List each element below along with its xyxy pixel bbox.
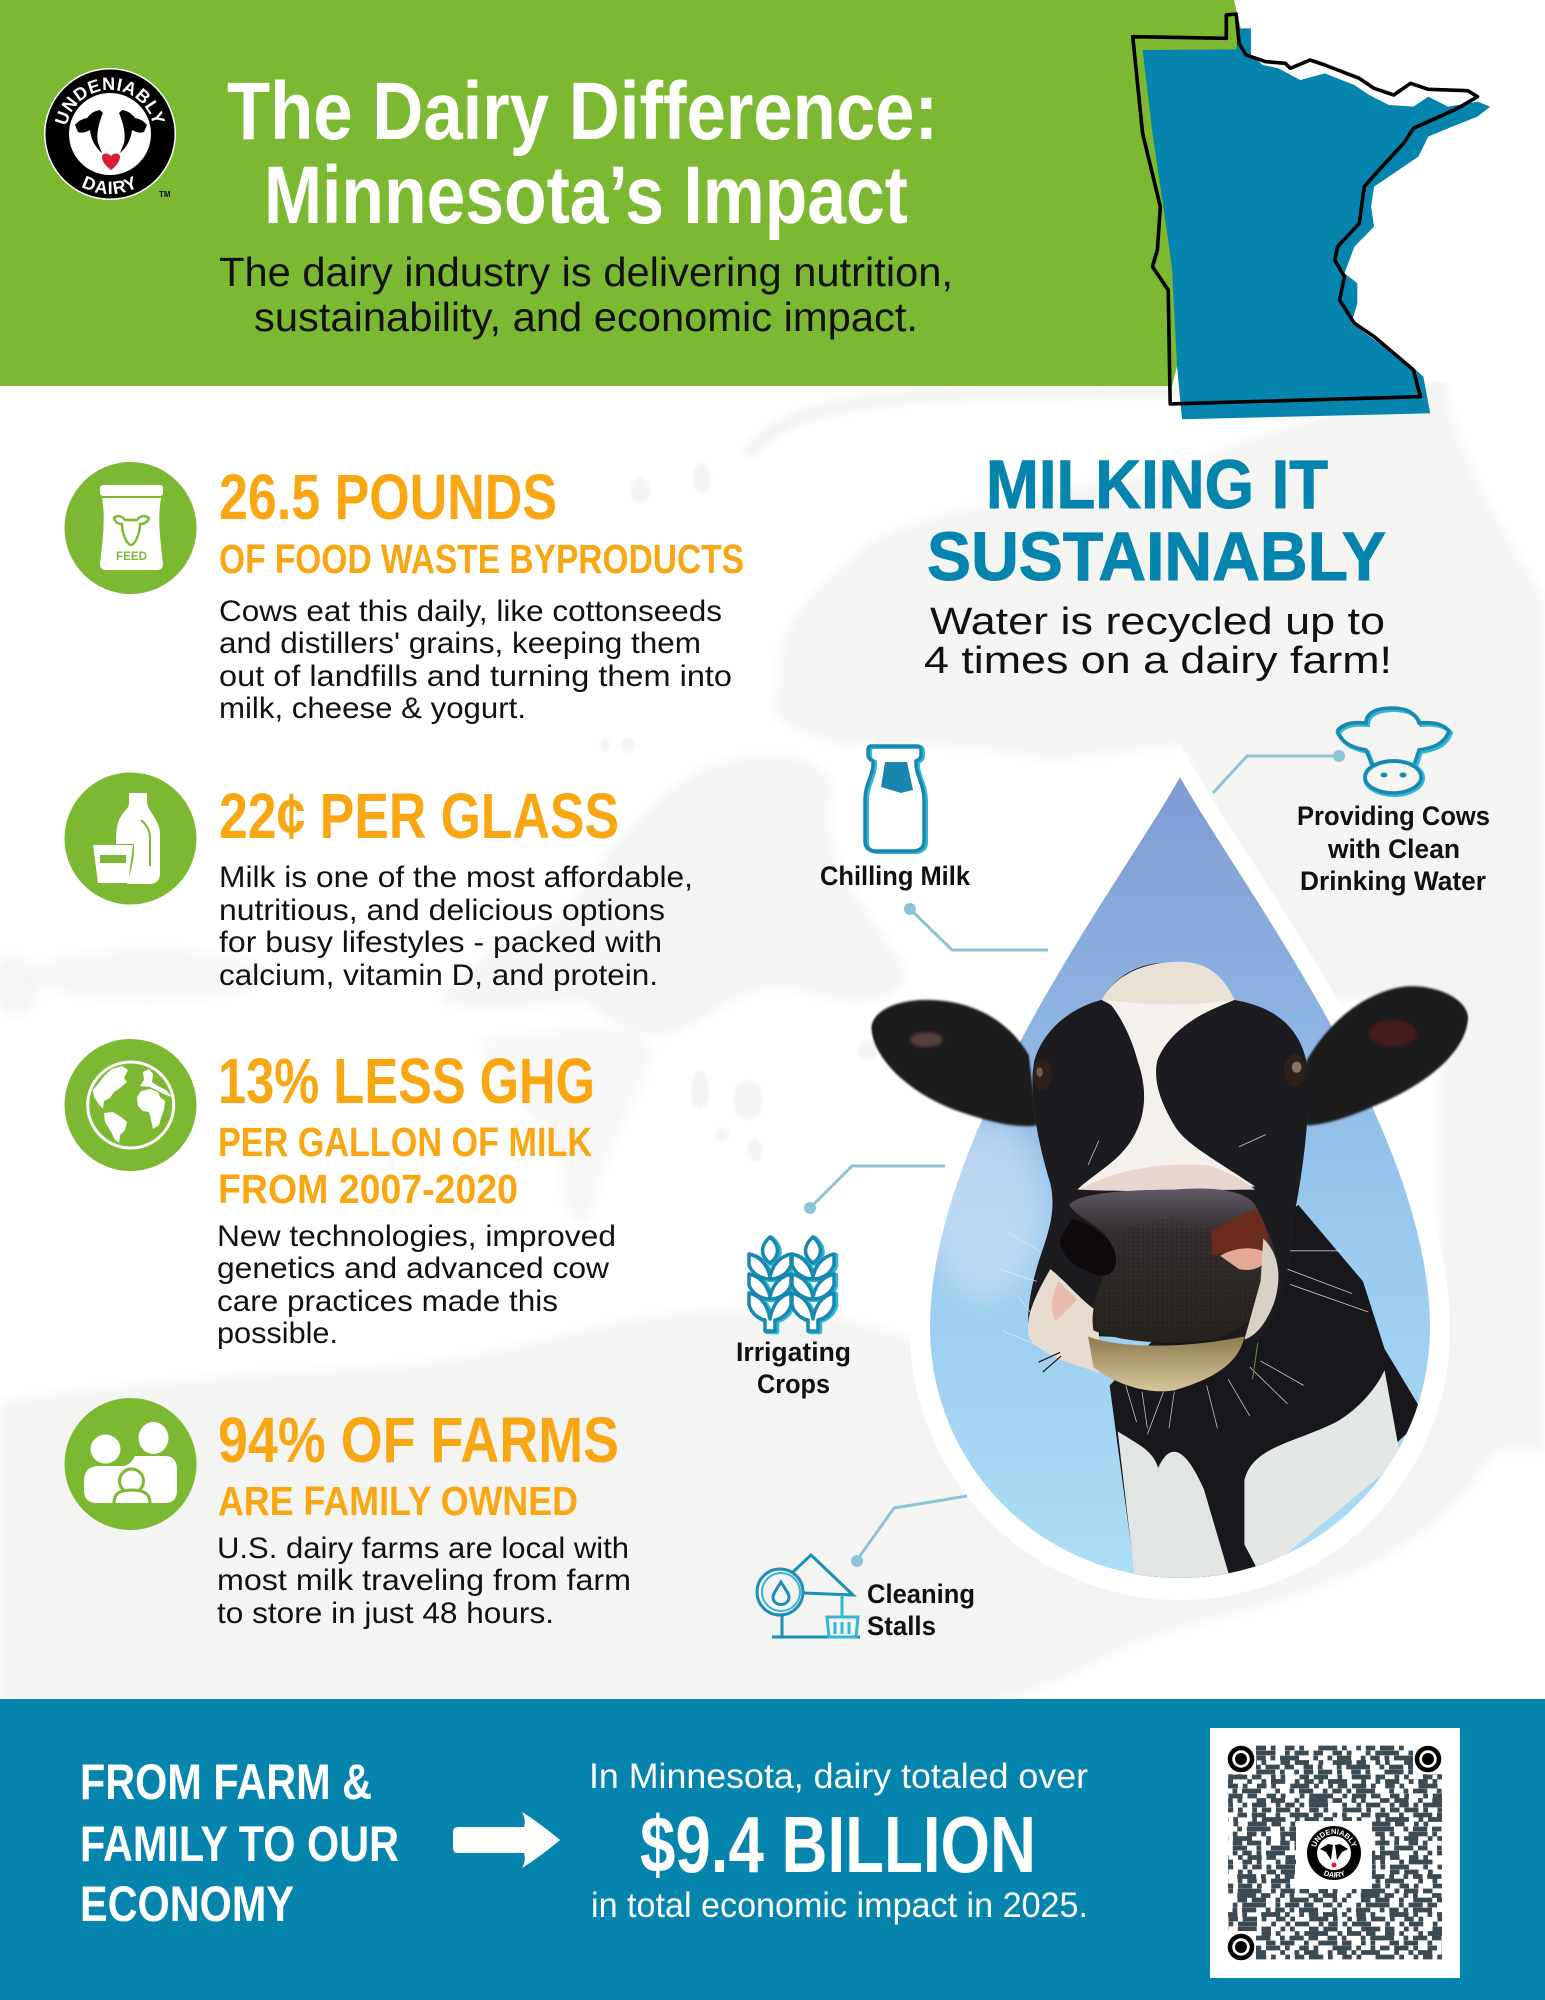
arrow (453, 1812, 560, 1868)
left muzzle (1028, 1269, 1099, 1373)
label: Providing Cows (1297, 801, 1490, 831)
stat heading: 13% LESS GHG (218, 1045, 595, 1117)
stat description: and distillers' grains, keeping them (219, 627, 701, 660)
left ear (871, 1000, 1037, 1126)
stat panel: food waste (64, 461, 744, 725)
connector line (851, 1496, 967, 1567)
drop white border (910, 745, 1450, 1600)
stat description: possible. (217, 1317, 338, 1350)
chin (1088, 1336, 1244, 1391)
stat description: for busy lifestyles - packed with (219, 926, 662, 959)
label (1297, 801, 1490, 896)
Undeniably Dairy logo (44, 68, 176, 200)
connector line (1213, 750, 1345, 793)
QR centre logo: UNDENIABLY (1311, 1828, 1357, 1847)
icon: globe (64, 1039, 196, 1171)
callout: cleaning stalls (757, 1496, 975, 1641)
footer heading (80, 1754, 399, 1932)
label: Crops (757, 1369, 830, 1399)
QR centre logo: DAIRY (1324, 1870, 1344, 1878)
stat description: most milk traveling from farm (217, 1564, 631, 1597)
footer heading: ECONOMY (80, 1876, 294, 1932)
stat heading: 22¢ PER GLASS (219, 780, 619, 852)
Undeniably Dairy logo: UNDENIABLY (54, 78, 166, 124)
title: Minnesota’s Impact (264, 150, 908, 241)
heading: Milking It Sustainably: SUSTAINABLY (927, 518, 1386, 595)
stat description (217, 1532, 631, 1630)
stat description: Milk is one of the most affordable, (219, 861, 693, 894)
stat description: U.S. dairy farms are local with (217, 1532, 629, 1565)
icon: milk bottle (865, 746, 926, 852)
stat description: calcium, vitamin D, and protein. (219, 959, 658, 992)
stat description (219, 861, 693, 992)
state blue fill (1143, 28, 1490, 419)
stat subheading: FROM 2007-2020 (218, 1166, 518, 1212)
label (867, 1579, 975, 1641)
economic impact text: in total economic impact in 2025. (591, 1886, 1088, 1925)
QR centre logo (1307, 1826, 1361, 1880)
icon: feed bag (64, 462, 196, 594)
stat subheading: OF FOOD WASTE BYPRODUCTS (219, 536, 744, 582)
nose (1069, 1189, 1277, 1343)
cloud in sky (925, 1120, 1045, 1300)
state black outline (1133, 14, 1478, 404)
icon: stall and brush (757, 1555, 860, 1637)
footer heading: FAMILY TO OUR (80, 1816, 399, 1872)
stat description: genetics and advanced cow (217, 1252, 609, 1285)
icon: family (64, 1398, 196, 1530)
Undeniably Dairy logo: DAIRY (82, 176, 134, 194)
stat description: Cows eat this daily, like cottonseeds (219, 595, 722, 628)
icon: wheat (749, 1237, 836, 1332)
callout: chilling milk (820, 746, 1048, 950)
water recycling text: 4 times on a dairy farm! (924, 640, 1392, 682)
water recycling text: Water is recycled up to (930, 601, 1385, 643)
head (1028, 963, 1308, 1343)
stat subheading (218, 1119, 592, 1212)
stat description: out of landfills and turning them into (219, 660, 732, 693)
eyes (1033, 1059, 1052, 1090)
stat heading: 94% OF FARMS (218, 1404, 619, 1476)
label (736, 1337, 851, 1399)
label: Stalls (867, 1611, 936, 1641)
label: with Clean (1327, 834, 1460, 864)
Undeniably Dairy logo: TM (159, 190, 171, 199)
stat description: care practices made this (217, 1285, 558, 1318)
footer heading: FROM FARM & (80, 1754, 372, 1810)
footer panel (0, 1699, 1545, 2000)
whiskers (999, 1135, 1368, 1434)
drop sky (930, 777, 1430, 1578)
stat description: to store in just 48 hours. (217, 1597, 554, 1630)
stat description: milk, cheese & yogurt. (219, 692, 526, 725)
heading: Milking It Sustainably (927, 446, 1386, 595)
stat description: nutritious, and delicious options (219, 894, 665, 927)
stat description (219, 595, 732, 725)
title (227, 66, 938, 241)
label: Irrigating (736, 1337, 851, 1367)
subtitle: The dairy industry is delivering nutrition, (219, 249, 953, 295)
callout: irrigating crops (736, 1166, 945, 1399)
QR code (1210, 1728, 1460, 1978)
economic impact text (589, 1757, 1088, 1925)
header green band (0, 0, 1246, 386)
cow head (871, 962, 1468, 1434)
water recycling text (924, 601, 1392, 682)
economic impact text: In Minnesota, dairy totaled over (589, 1757, 1088, 1796)
callout: clean drinking water (1213, 708, 1490, 896)
connector line (904, 903, 1048, 950)
stat heading: 26.5 POUNDS (219, 461, 557, 533)
nostrils (1060, 1219, 1116, 1276)
subtitle: sustainability, and economic impact. (254, 294, 918, 340)
icon: milk bottle and glass (64, 772, 196, 904)
stat subheading: PER GALLON OF MILK (218, 1119, 592, 1165)
map of Minnesota (1133, 14, 1490, 419)
stat panel: family owned farms (64, 1398, 631, 1630)
label: Chilling Milk (820, 861, 971, 891)
poll tuft (1102, 962, 1235, 1049)
icon: feed bag: FEED (116, 549, 147, 563)
heading: Milking It Sustainably: MILKING IT (986, 446, 1328, 523)
connector line (804, 1166, 945, 1214)
right ear (1306, 986, 1468, 1125)
title: The Dairy Difference: (227, 66, 938, 157)
stat description (217, 1220, 616, 1350)
water drop with cow (871, 745, 1468, 1600)
cow neck (1110, 1205, 1425, 1587)
label: Cleaning (867, 1579, 975, 1609)
stat panel: greenhouse gas (64, 1039, 616, 1350)
stat description: New technologies, improved (217, 1220, 616, 1253)
white blaze (1077, 1000, 1255, 1190)
stat subheading: ARE FAMILY OWNED (218, 1478, 578, 1524)
economic impact text: $9.4 BILLION (640, 1800, 1036, 1889)
stat panel: price per glass (64, 772, 693, 992)
subtitle (219, 249, 953, 340)
icon: cow head (1337, 708, 1451, 795)
label: Drinking Water (1300, 866, 1486, 896)
